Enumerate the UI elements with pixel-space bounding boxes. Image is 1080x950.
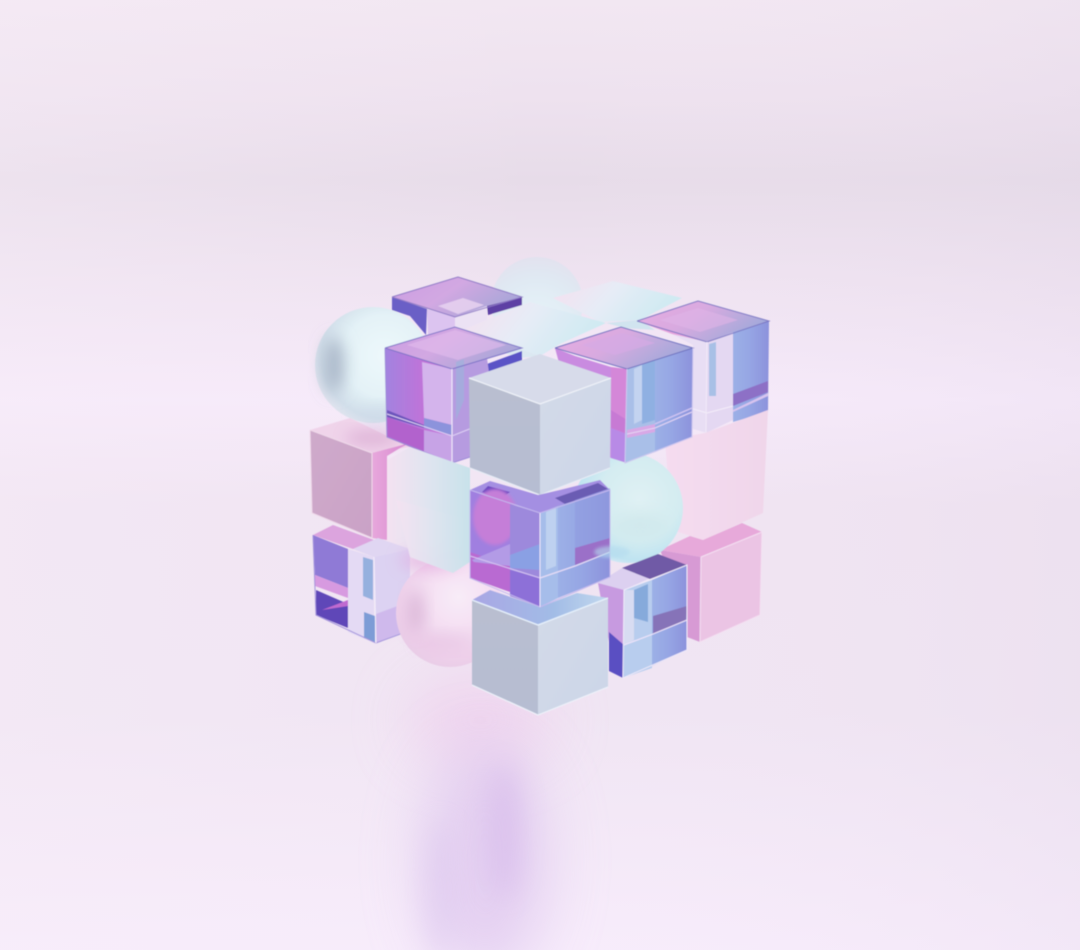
glass cube: lower right xyxy=(598,554,687,678)
cube: top front white xyxy=(469,354,611,495)
glass cube: front left xyxy=(385,327,522,463)
cube: middle pale xyxy=(387,447,470,573)
cube: middle pale front overlap xyxy=(396,500,470,573)
sphere: left pearl xyxy=(315,307,431,423)
sphere: right aqua edge shading xyxy=(594,546,630,558)
cube: right upper pink xyxy=(665,410,768,540)
cube: center flat white top xyxy=(465,302,606,358)
main cube assembly xyxy=(310,257,769,715)
sphere: pink pearl xyxy=(396,551,504,667)
cube: right lower pink xyxy=(660,523,762,642)
glass cube: right back xyxy=(637,301,769,433)
sphere: right aqua xyxy=(573,453,683,563)
cube: left pink xyxy=(310,418,410,540)
glass cube: center xyxy=(470,480,610,607)
cube: bottom white xyxy=(472,590,608,715)
glass cube: middle xyxy=(555,327,693,463)
glass cube: lower left xyxy=(313,525,410,643)
blurred reflection beneath the cube xyxy=(410,680,550,950)
cube: back flat white top xyxy=(553,281,682,330)
sphere: back top xyxy=(491,257,583,349)
glass cube: back left xyxy=(392,277,522,335)
